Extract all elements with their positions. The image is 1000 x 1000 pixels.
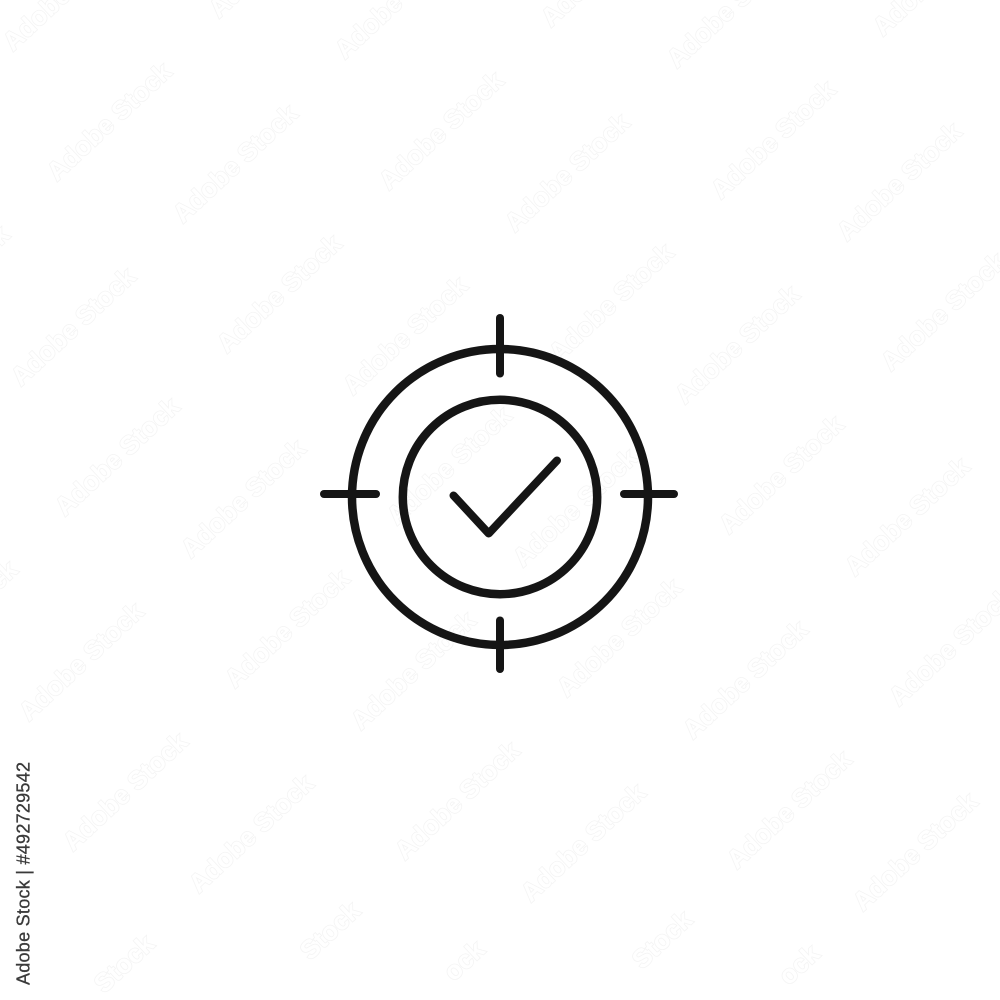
- watermark pattern: Adobe Stock: [49, 391, 186, 522]
- watermark pattern: Adobe Stock: [499, 107, 636, 238]
- watermark pattern: Adobe Stock: [183, 768, 320, 899]
- watermark pattern: Adobe Stock: [381, 400, 518, 531]
- watermark pattern: Adobe Stock: [167, 98, 304, 229]
- watermark pattern: Adobe Stock: [847, 786, 984, 917]
- inner ring: [403, 400, 597, 594]
- watermark pattern: Adobe Stock: [389, 735, 526, 866]
- watermark pattern: ock: [772, 938, 826, 991]
- watermark pattern: Adobe Stock: [13, 596, 150, 727]
- watermark pattern: Adobe Stock: [337, 270, 474, 401]
- stock id label: Adobe Stock | #492729542: [14, 762, 34, 985]
- watermark pattern: Adobe Stock: [211, 228, 348, 359]
- check mark: [454, 460, 557, 534]
- watermark pattern: Adobe Stock: [677, 614, 814, 745]
- watermark pattern: ock: [437, 934, 491, 987]
- watermark pattern: Adobe Stock: [705, 74, 842, 205]
- icon: target with check mark: [324, 318, 674, 669]
- watermark pattern: Adobe Stock: [219, 563, 356, 694]
- watermark pattern: Adobe Stock: [41, 56, 178, 187]
- watermark pattern: Adobe Stock: [839, 451, 976, 582]
- watermark pattern: Adobe Stock: [669, 279, 806, 410]
- watermark pattern: Adobe Stock: [543, 237, 680, 368]
- crosshair tick: bottom: [496, 620, 504, 669]
- outer ring: [352, 349, 648, 645]
- crosshair tick: right: [624, 490, 674, 498]
- watermark pattern: Adobe Stock: [373, 65, 510, 196]
- watermark pattern: Adobe Stock: [507, 442, 644, 573]
- watermark pattern: Adobe Stock: [5, 261, 142, 392]
- watermark pattern: Adobe Stock: [57, 726, 194, 857]
- watermark pattern: Adobe Stock: [551, 572, 688, 703]
- crosshair tick: top: [496, 318, 504, 374]
- watermark pattern: Adobe Stock: [175, 433, 312, 564]
- watermark pattern: Adobe Stock: [345, 605, 482, 736]
- watermark pattern: Adobe Stock: [831, 116, 968, 247]
- watermark pattern: Adobe Stock: [515, 777, 652, 908]
- watermark pattern: Stock: [626, 904, 698, 975]
- watermark pattern: Stock: [88, 928, 160, 999]
- crosshair tick: left: [324, 490, 376, 498]
- watermark pattern: Adobe Stock: [721, 744, 858, 875]
- watermark pattern: Adobe Stock: [713, 409, 850, 540]
- watermark pattern: Stock: [294, 895, 366, 966]
